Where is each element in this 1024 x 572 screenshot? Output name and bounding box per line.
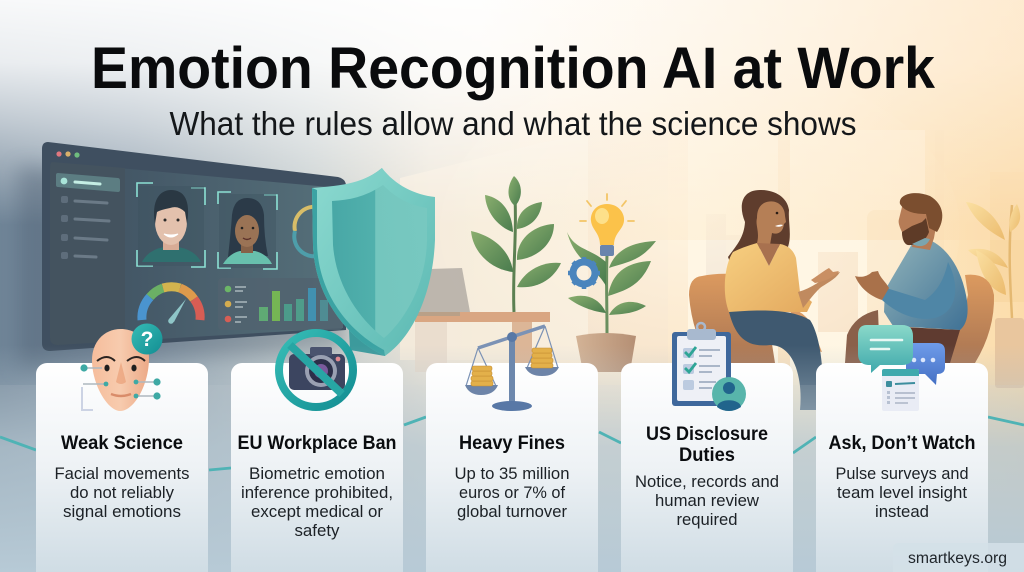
desk and laptop bbox=[396, 268, 550, 372]
face scan: woman bbox=[218, 192, 277, 269]
text block: safety bbox=[294, 522, 340, 540]
panel: heavy fines bbox=[426, 363, 598, 572]
text block: required bbox=[676, 511, 738, 529]
heading: Weak Science bbox=[61, 432, 183, 454]
icon: clipboard checklist with person bbox=[672, 323, 746, 411]
panel: eu workplace ban bbox=[231, 363, 403, 572]
heading: EU Workplace Ban bbox=[238, 432, 396, 454]
text block bbox=[836, 465, 968, 521]
icon: chat bubbles and survey bbox=[858, 325, 945, 411]
text block: Pulse surveys and bbox=[836, 465, 968, 483]
title: Emotion Recognition AI at Work bbox=[91, 36, 936, 101]
floor and fade bbox=[0, 345, 1024, 572]
text block: Facial movements bbox=[54, 465, 190, 483]
text block bbox=[241, 465, 393, 540]
text block: inference prohibited, bbox=[241, 484, 393, 502]
panel: weak science bbox=[36, 363, 208, 572]
illustration: woman in armchair bbox=[689, 190, 840, 410]
text block bbox=[54, 465, 190, 521]
emotion gauge bbox=[142, 287, 200, 324]
heading bbox=[646, 423, 768, 466]
icon: scales with coins bbox=[465, 326, 559, 411]
heading: US Disclosure bbox=[646, 423, 768, 445]
shield bbox=[312, 168, 435, 356]
text block: team level insight bbox=[837, 484, 967, 502]
icon: face with tracking points and question mark bbox=[80, 324, 162, 411]
icon: face with tracking points and question mark: ? bbox=[141, 328, 153, 351]
window dots bbox=[56, 151, 80, 158]
lightbulb bbox=[580, 194, 634, 256]
icon: crossed out camera bbox=[279, 333, 353, 407]
gear bbox=[568, 257, 600, 289]
source tag bbox=[893, 543, 1024, 572]
text block: human review bbox=[655, 492, 759, 510]
face scan: man bbox=[137, 183, 205, 267]
background plant right bbox=[966, 202, 1024, 388]
text block: except medical or bbox=[251, 503, 384, 521]
source tag: smartkeys.org bbox=[908, 550, 1007, 567]
bar chart panel bbox=[218, 278, 343, 330]
heading: Duties bbox=[679, 444, 735, 466]
text block bbox=[454, 465, 570, 521]
text block: Biometric emotion bbox=[249, 465, 385, 483]
monitor shadow bbox=[18, 165, 345, 370]
text block: do not reliably bbox=[70, 484, 175, 502]
lightbulb plant bbox=[567, 194, 656, 372]
subtitle: What the rules allow and what the science shows bbox=[170, 105, 856, 142]
plant on desk bbox=[471, 176, 561, 312]
heading: Ask, Don’t Watch bbox=[828, 432, 976, 454]
panel: ask, don't watch bbox=[816, 363, 988, 572]
text block: instead bbox=[875, 503, 929, 521]
panel: us disclosure duties bbox=[621, 363, 793, 572]
text block: euros or 7% of bbox=[459, 484, 565, 502]
pot bbox=[576, 333, 636, 372]
heading: Heavy Fines bbox=[459, 432, 565, 454]
illustration: man in armchair bbox=[845, 193, 994, 363]
text block: Notice, records and bbox=[635, 473, 779, 491]
text block: signal emotions bbox=[63, 503, 181, 521]
text block: global turnover bbox=[457, 503, 568, 521]
sidebar menu bbox=[56, 173, 120, 259]
text block bbox=[635, 473, 779, 529]
dashboard monitor bbox=[42, 142, 346, 351]
text block: Up to 35 million bbox=[454, 465, 570, 483]
donut chart bbox=[294, 207, 318, 256]
network line segments bbox=[0, 417, 1024, 470]
